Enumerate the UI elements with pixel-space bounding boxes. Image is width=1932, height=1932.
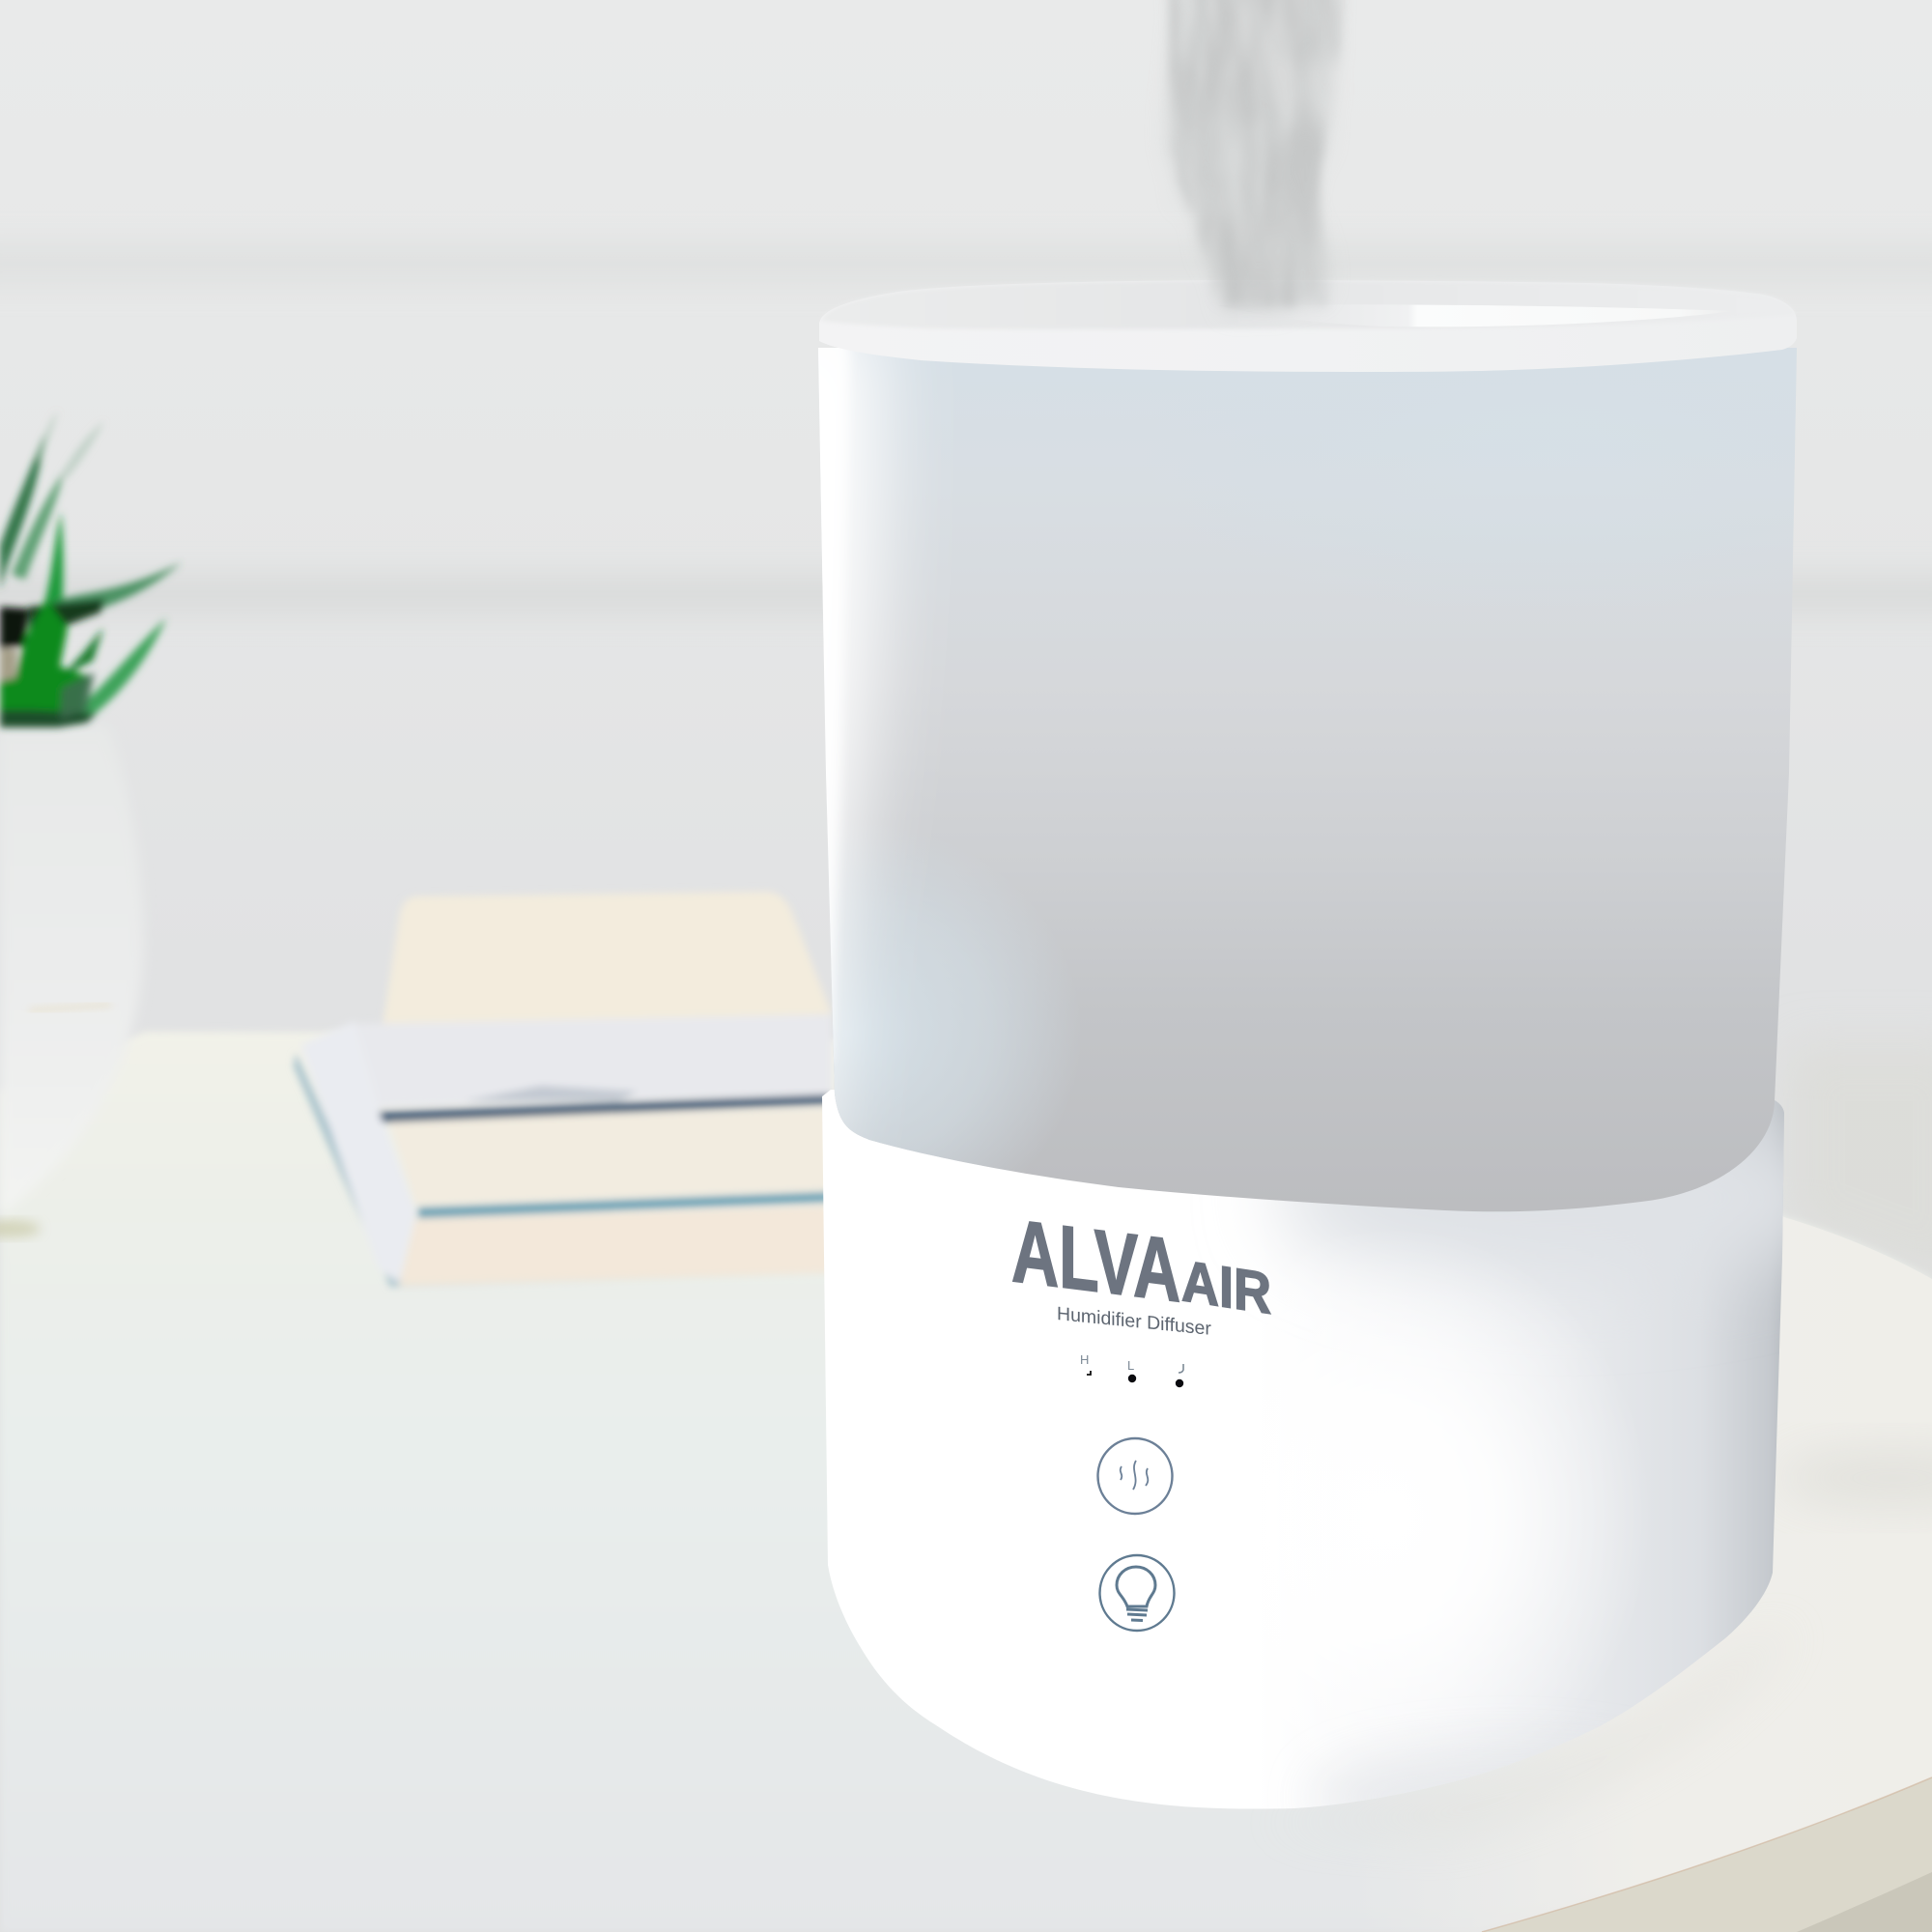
bottom book pages <box>399 1206 831 1286</box>
lid top surface <box>821 280 1795 329</box>
icon: mist button <box>1097 1438 1173 1514</box>
top book pages <box>383 892 832 1027</box>
mist level indicators <box>1080 1352 1183 1387</box>
white book cover <box>355 1014 832 1107</box>
middle book pages <box>388 1108 831 1206</box>
glossy recess in lid <box>1217 304 1734 327</box>
logo: ALVA AIR: ALVA <box>1011 1202 1180 1321</box>
humidifier water tank <box>818 348 1797 1211</box>
product name: Humidifier Diffuser <box>1057 1303 1211 1340</box>
stack of books <box>294 892 832 1287</box>
mist rising from the humidifier <box>1167 0 1345 307</box>
dark page line <box>379 1094 831 1122</box>
blue book edge <box>294 1053 831 1287</box>
plant pot <box>0 726 143 1237</box>
book spine <box>301 1021 415 1283</box>
mist level indicators: H <box>1080 1352 1089 1367</box>
round table top <box>0 1032 1932 1932</box>
humidifier base <box>822 1090 1784 1808</box>
logo: ALVA AIR: AIR <box>1181 1249 1271 1326</box>
grey smudge above the page line <box>464 1086 638 1101</box>
table rim <box>1482 1777 1932 1932</box>
plant leaves <box>0 411 182 727</box>
logo: ALVA AIR <box>1011 1202 1271 1326</box>
icon: light button <box>1099 1555 1175 1631</box>
humidifier lid <box>819 280 1797 372</box>
teal cover line <box>418 1192 831 1218</box>
mist level indicators: L <box>1127 1358 1134 1373</box>
